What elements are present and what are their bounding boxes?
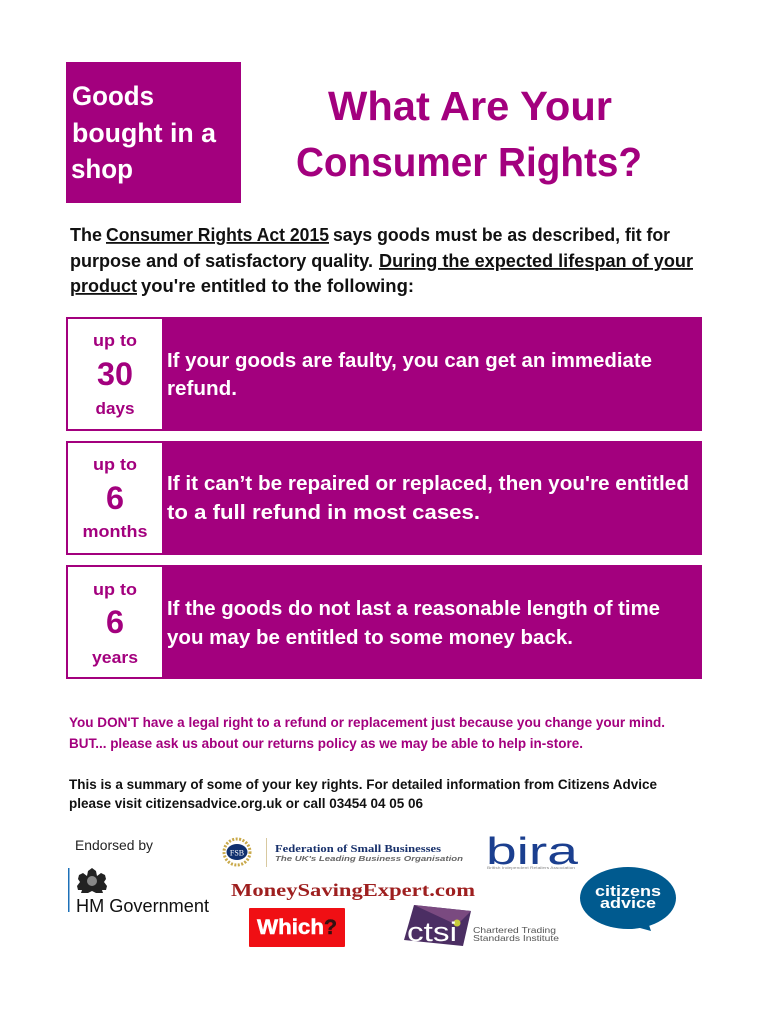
logo: HM Government: HM Government xyxy=(76,895,209,916)
panel: up to 6 months xyxy=(66,441,702,555)
logo: bira: British Independent Retailers Association xyxy=(487,865,575,870)
logo: ctsi xyxy=(404,905,559,947)
panel: up to 6 years: 6 xyxy=(106,604,124,640)
title xyxy=(296,83,642,185)
logo: ctsi: Chartered Trading xyxy=(473,925,556,935)
panel: up to 30 days xyxy=(66,317,702,431)
logo: Which? xyxy=(249,908,345,947)
intro text block: The xyxy=(70,225,102,245)
panel: up to 6 months: to a full refund in most cases. xyxy=(167,502,480,524)
logo: Federation of Small Businesses: Federation of Small Businesses xyxy=(275,844,441,855)
logo: ctsi: ctsi xyxy=(407,917,457,947)
notice: no legal right to refund: You DON'T have a legal right to a refund or replacement just because you change your mind. xyxy=(69,715,665,730)
panel: up to 6 months: If it can’t be repaired or replaced, then you're entitled xyxy=(167,473,689,495)
title: Consumer Rights? xyxy=(296,139,642,185)
panel: up to 30 days: refund. xyxy=(167,378,237,400)
logo: citizens advice xyxy=(580,867,676,931)
intro text block: During the expected lifespan of your xyxy=(379,251,693,271)
intro text block xyxy=(70,225,693,296)
intro text block: says goods must be as described, fit for xyxy=(333,225,670,245)
logo: ctsi: Standards Institute xyxy=(473,933,559,943)
logo: bira xyxy=(486,831,579,873)
notice: no legal right to refund xyxy=(69,715,665,751)
logo: HM Government xyxy=(68,868,209,916)
logo: MoneySavingExpert: MoneySavingExpert.com xyxy=(231,880,475,900)
logo: bira: bira xyxy=(486,831,579,873)
title: What Are Your xyxy=(328,83,612,129)
logo: citizens advice: citizens xyxy=(595,883,661,900)
panel: up to 30 days: days xyxy=(96,399,134,418)
summary text: This is a summary of some of your key rights. For detailed information from Citizens Advice xyxy=(69,777,657,792)
logo: Which?: Which xyxy=(257,916,324,939)
panel: up to 30 days: 30 xyxy=(97,356,133,392)
intro text block: you're entitled to the following: xyxy=(141,276,414,296)
panel: up to 30 days: up to xyxy=(93,331,137,350)
panel: up to 6 years: up to xyxy=(93,580,137,599)
panel: up to 6 years: you may be entitled to some money back. xyxy=(167,627,573,649)
panel: goods bought in a shop xyxy=(66,62,241,203)
panel: goods bought in a shop: shop xyxy=(71,154,133,184)
logo: Federation of Small Businesses: FSB xyxy=(230,848,244,858)
panel: goods bought in a shop: bought in a xyxy=(72,118,217,148)
intro text block: product xyxy=(70,276,137,296)
summary text: please visit citizensadvice.org.uk or call 03454 04 05 06 xyxy=(69,796,423,811)
panel: goods bought in a shop: Goods xyxy=(72,81,154,111)
intro text block: purpose and of satisfactory quality. xyxy=(70,251,373,271)
panel: up to 6 months: 6 xyxy=(106,480,124,516)
panel: up to 6 years: If the goods do not last a reasonable length of time xyxy=(167,598,660,620)
panel: up to 30 days: If your goods are faulty, you can get an immediate xyxy=(167,350,652,372)
panel: up to 6 months: up to xyxy=(93,455,137,474)
notice: no legal right to refund: BUT... please ask us about our returns policy as we may be able to help in-store. xyxy=(69,736,583,751)
logo: Which?: ? xyxy=(324,916,337,939)
panel: up to 6 years xyxy=(66,565,702,679)
logo: citizens advice: advice xyxy=(600,895,656,912)
panel: up to 6 years: years xyxy=(92,648,138,667)
logo: Federation of Small Businesses xyxy=(224,838,464,867)
intro text block: Consumer Rights Act 2015 xyxy=(106,225,329,245)
logo: Federation of Small Businesses: The UK's Leading Business Organisation xyxy=(275,854,464,863)
endorsed by label: Endorsed by xyxy=(75,838,153,853)
summary text xyxy=(69,777,657,811)
panel: up to 6 months: months xyxy=(82,522,148,541)
